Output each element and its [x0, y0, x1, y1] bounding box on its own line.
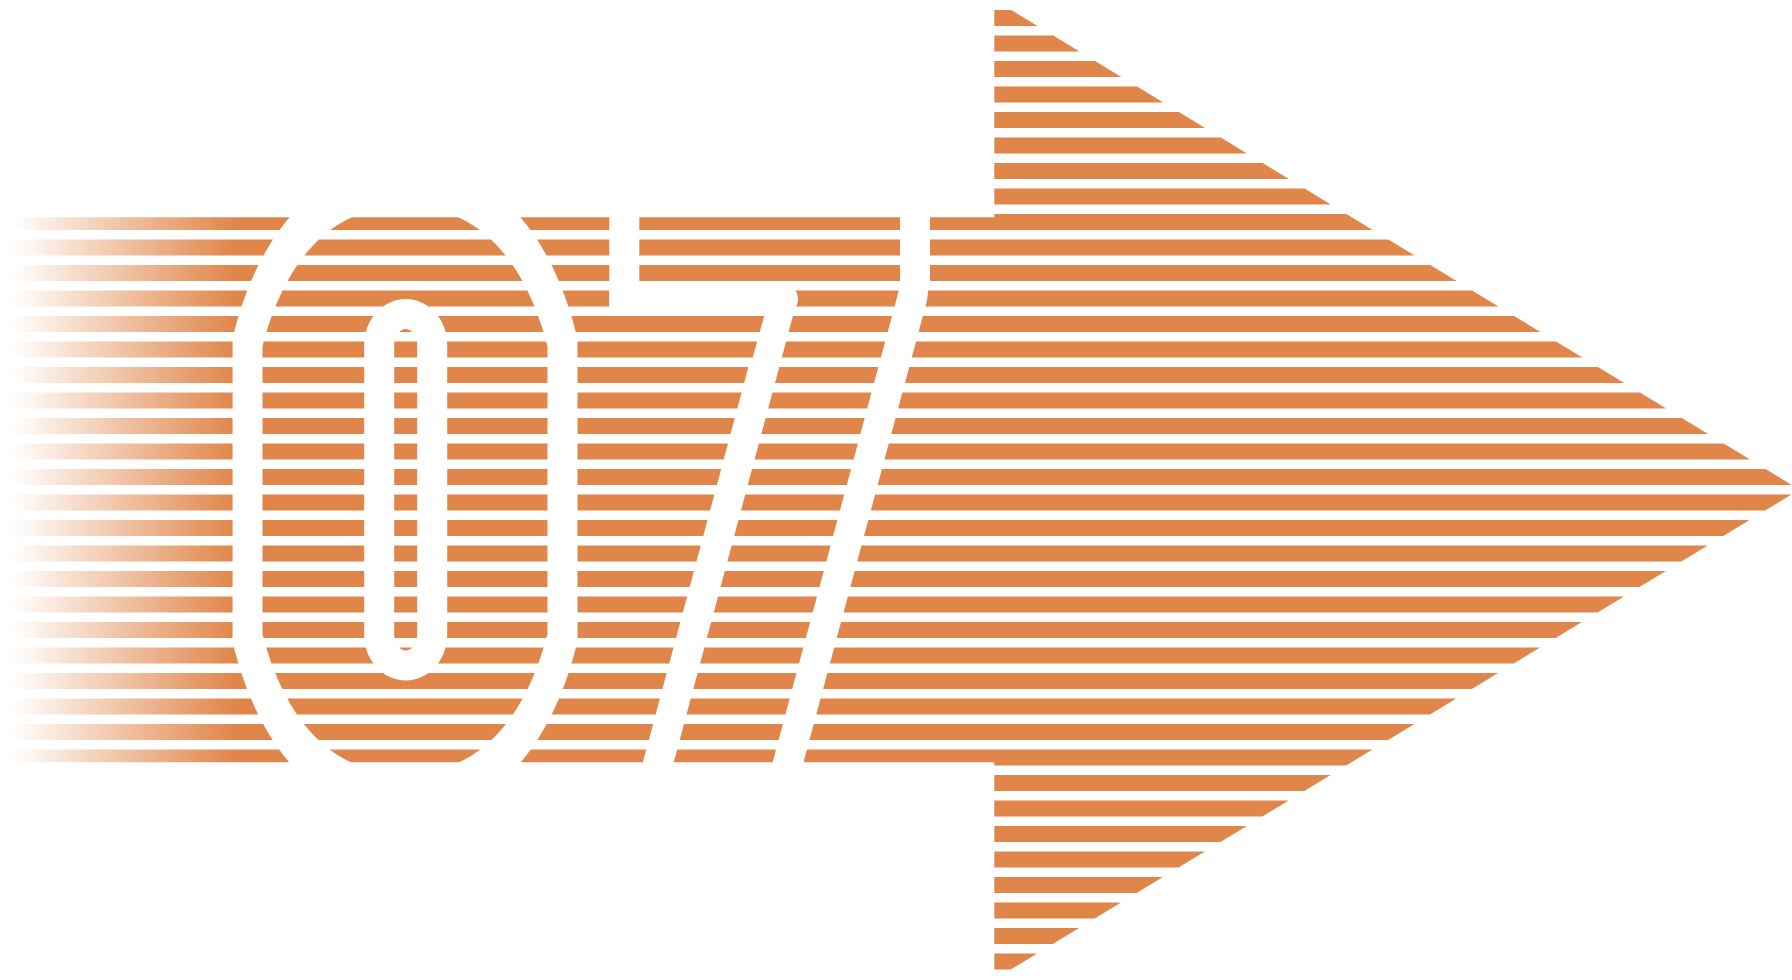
number 07: white outline band cut through the stripes — [232, 217, 930, 762]
